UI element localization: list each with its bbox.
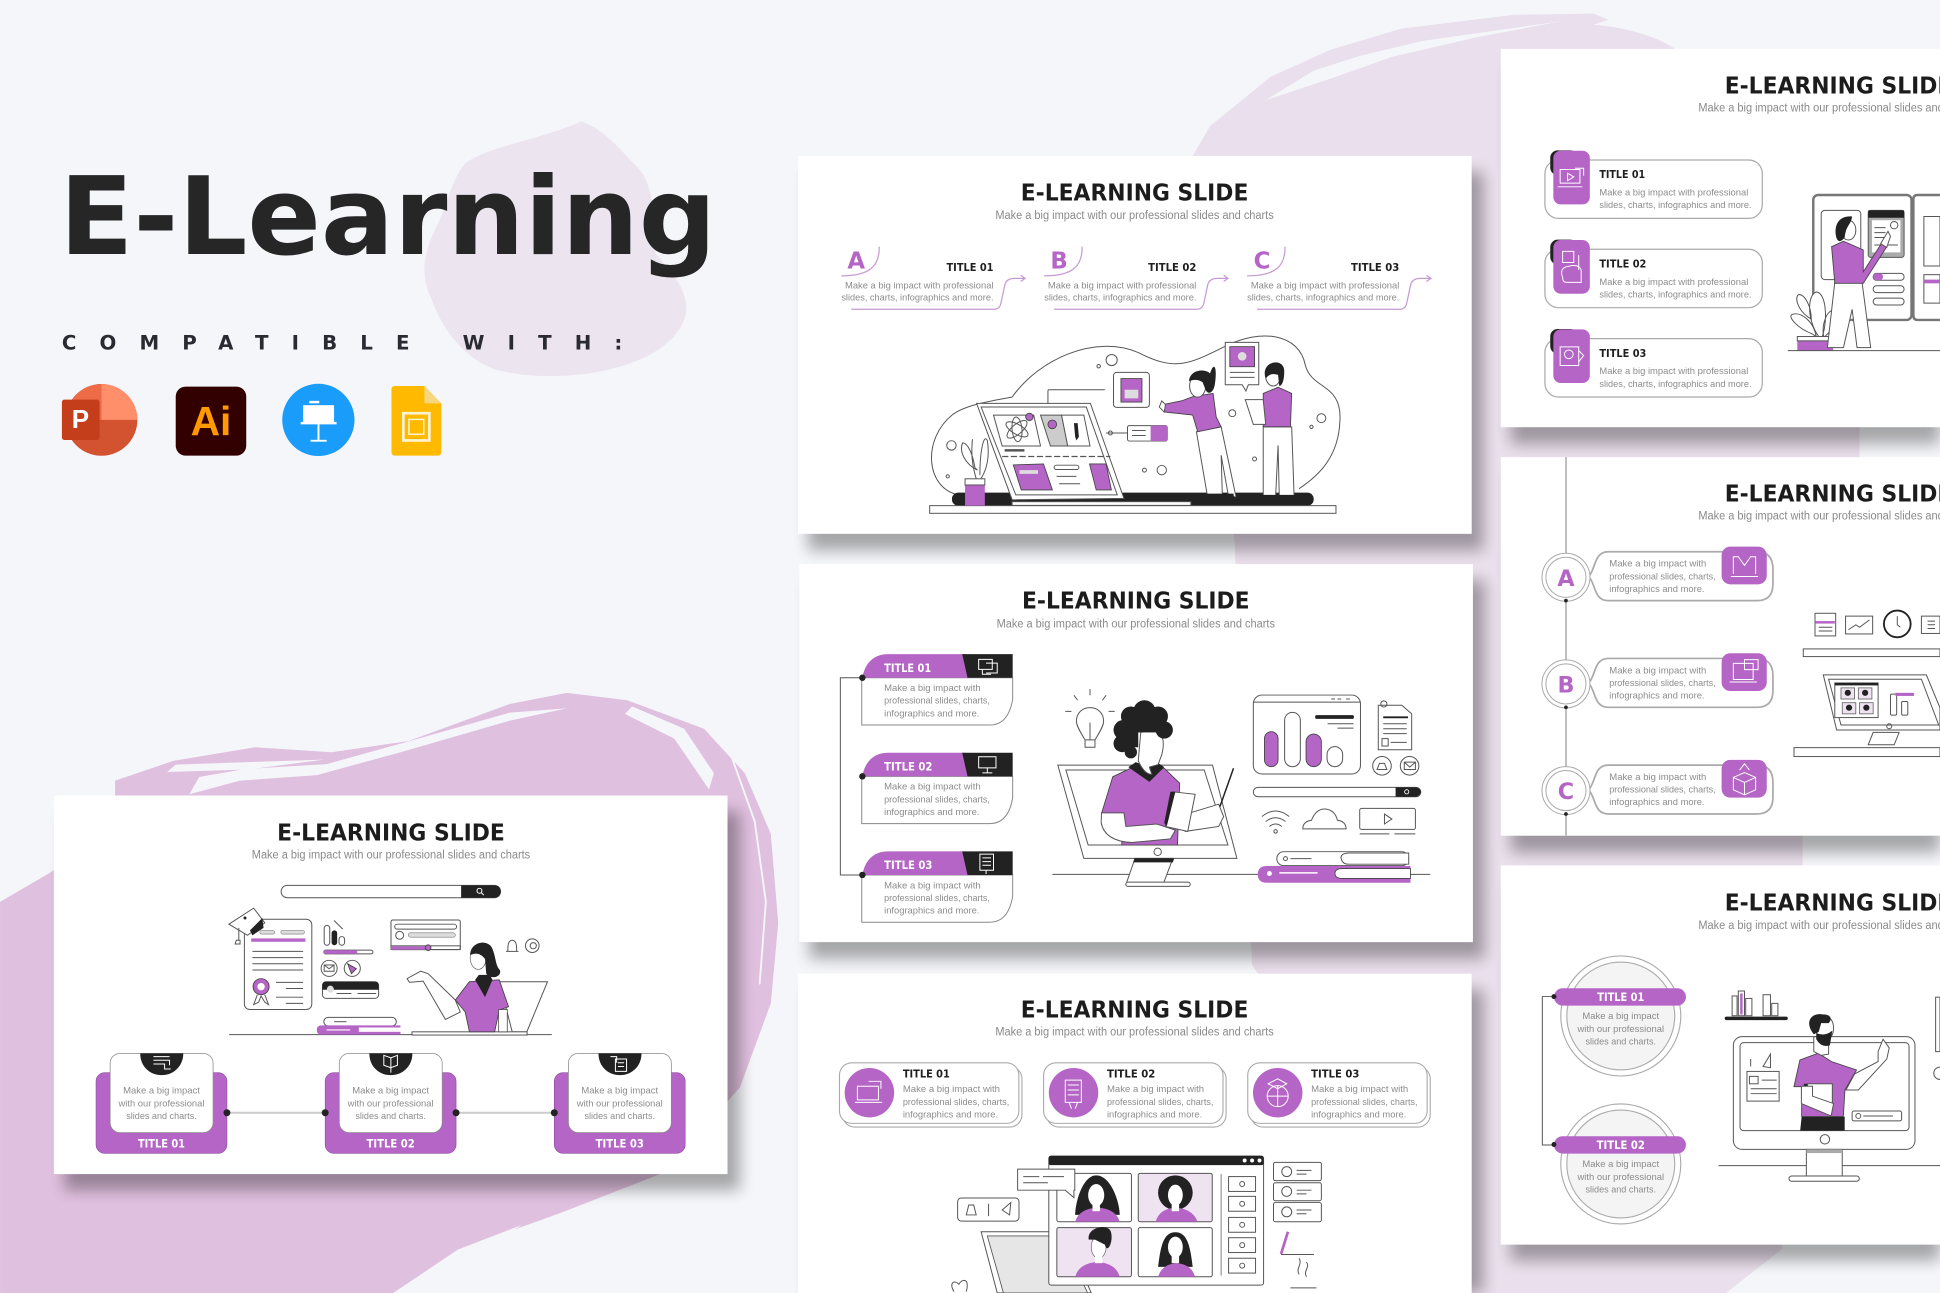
panel: slide 1: [798, 156, 1483, 551]
card 03: Make a big impact: [581, 1085, 658, 1096]
card 01: [1545, 150, 1762, 218]
books: [1277, 852, 1409, 866]
card 01: professional slides, charts,: [903, 1096, 1009, 1107]
heading: E-LEARNING SLIDE: [1021, 997, 1248, 1023]
dark card: [322, 982, 379, 998]
laptop: [499, 982, 547, 1032]
brush: top right: [1193, 14, 1860, 1293]
circle card 02: Make a big impact: [1582, 1158, 1660, 1169]
card 02: Make a big impact with: [884, 781, 981, 792]
card 01: TITLE 01: [138, 1137, 185, 1151]
card 01: TITLE 01: [903, 1068, 950, 1081]
step B: B: [1050, 248, 1068, 274]
search bar: [1253, 787, 1421, 797]
circle card 01: with our professional: [1576, 1023, 1664, 1034]
card 03: TITLE 03: [1599, 347, 1646, 360]
panel: slide 2: [799, 564, 1485, 959]
card 02: infographics and more.: [1107, 1109, 1202, 1120]
panel: right slide 2: [1501, 457, 1940, 852]
card 01: infographics and more.: [884, 707, 979, 718]
icon: Keynote: [282, 384, 354, 456]
card 01: infographics and more.: [903, 1109, 998, 1120]
arm: [407, 971, 460, 1019]
card 03: slides, charts, infographics and more.: [1599, 378, 1752, 389]
icon: Illustrator: Ai: [191, 398, 231, 444]
illustration: video call: [952, 1156, 1321, 1293]
card 03: slides and charts.: [584, 1110, 655, 1121]
icon: PowerPoint: P: [72, 404, 89, 434]
step A: TITLE 01: [946, 261, 994, 274]
circle card 02: [1551, 1104, 1686, 1224]
item A: infographics and more.: [1609, 583, 1705, 594]
step C: Make a big impact with professional: [1251, 279, 1399, 290]
item A: Make a big impact with: [1609, 558, 1706, 569]
certificate: [244, 919, 312, 1010]
illustration: man at board: [1788, 195, 1940, 351]
step C: slides, charts, infographics and more.: [1247, 292, 1399, 303]
item B: infographics and more.: [1609, 690, 1705, 701]
item B: [1542, 653, 1773, 709]
card 01: [96, 1053, 230, 1153]
illustration: woman and learning widgets: [229, 908, 552, 1035]
video: [1360, 808, 1415, 829]
circle card 01: slides and charts.: [1586, 1036, 1656, 1047]
arm: [1178, 804, 1224, 831]
step C: TITLE 03: [1351, 261, 1399, 274]
step C: [1247, 247, 1431, 309]
card 02: professional slides, charts,: [1107, 1096, 1213, 1107]
card 03: TITLE 03: [884, 858, 932, 872]
item B: Make a big impact with: [1609, 664, 1706, 675]
card 02: Make a big impact: [352, 1085, 429, 1096]
item C: professional slides, charts,: [1609, 784, 1716, 795]
tile 4: [1138, 1228, 1212, 1277]
subheading: Make a big impact with our professional slides and charts: [997, 616, 1275, 630]
woman: [455, 980, 509, 1032]
document: [1378, 705, 1412, 750]
tile 2: [1138, 1173, 1212, 1222]
light bulb: [1065, 689, 1115, 747]
search bar: [281, 885, 501, 898]
card 01: slides, charts, infographics and more.: [1599, 199, 1752, 210]
card 03: infographics and more.: [1311, 1109, 1406, 1120]
circle card 01: Make a big impact: [1582, 1010, 1660, 1021]
card 01: [839, 1063, 1022, 1127]
card 02: [322, 1053, 460, 1153]
card 02: slides and charts.: [355, 1110, 426, 1121]
panel: slide 3: [798, 974, 1483, 1293]
plant: [1791, 292, 1836, 337]
heading: E-LEARNING SLIDE: [1021, 180, 1248, 206]
step A: A: [847, 248, 865, 274]
cloud: [1303, 809, 1346, 829]
step C: C: [1254, 248, 1270, 274]
card 03: Make a big impact with professional: [1599, 365, 1748, 376]
tile 1: [1057, 1173, 1131, 1222]
card 03: [859, 851, 1013, 922]
step A: [841, 247, 1025, 309]
card 01: TITLE 01: [1599, 168, 1645, 181]
wifi: [1262, 811, 1289, 826]
card 01: [859, 654, 1013, 725]
illustration: teacher on monitor: [1719, 991, 1940, 1181]
curly hair: [1114, 700, 1173, 758]
person: [1827, 282, 1871, 348]
step A: slides, charts, infographics and more.: [841, 292, 994, 303]
connector: [1542, 997, 1554, 1145]
item A: A: [1557, 566, 1575, 592]
card 03: TITLE 03: [596, 1137, 644, 1151]
card 01: Make a big impact with: [903, 1083, 1000, 1094]
step B: slides, charts, infographics and more.: [1044, 292, 1196, 303]
connector: [840, 678, 862, 875]
icon: PowerPoint: [62, 384, 137, 456]
subheading: Make a big impact with our professional slides and charts: [252, 848, 530, 862]
connectors: [227, 1112, 554, 1114]
card 02: [1545, 240, 1762, 308]
item B: B: [1557, 672, 1574, 698]
man: [1263, 427, 1294, 497]
books: [324, 1017, 396, 1026]
card 01: TITLE 01: [884, 661, 931, 675]
card 03: with our professional: [576, 1097, 663, 1108]
icon: Illustrator: [176, 387, 246, 456]
circle card 01: TITLE 01: [1597, 990, 1644, 1004]
card 02: [1044, 1063, 1226, 1127]
panel: right slide 3: [1501, 865, 1940, 1261]
card 02: TITLE 02: [366, 1137, 415, 1151]
card 02: slides, charts, infographics and more.: [1599, 289, 1752, 300]
graduation cap: [229, 908, 265, 935]
card 02: Make a big impact with professional: [1599, 276, 1748, 287]
compatible with heading: COMPATIBLE WITH:: [62, 332, 622, 355]
item A: professional slides, charts,: [1609, 570, 1716, 581]
card 02: TITLE 02: [1599, 257, 1646, 270]
panel: right slide 1: [1501, 49, 1940, 444]
illustration: teacher in monitor: [1052, 689, 1430, 886]
main title: E-Learning: [59, 155, 716, 280]
woman: [1196, 427, 1236, 497]
card 03: Make a big impact with: [884, 879, 981, 890]
card 03: [1545, 329, 1762, 397]
speech bubble: [1225, 342, 1259, 391]
step B: Make a big impact with professional: [1048, 279, 1196, 290]
card 03: TITLE 03: [1311, 1068, 1359, 1081]
subheading: Make a big impact with our professional slides and charts: [995, 208, 1274, 222]
illustration: computer with video call: [1794, 611, 1940, 757]
item C: C: [1558, 779, 1574, 805]
mini bars: [324, 925, 330, 945]
card 03: professional slides, charts,: [884, 892, 990, 903]
chart window: [1253, 695, 1360, 774]
card 03: infographics and more.: [884, 905, 979, 916]
card 01: Make a big impact with: [884, 682, 981, 693]
icon: Google Slides: [391, 386, 441, 456]
card 03: [551, 1053, 685, 1153]
step B: TITLE 02: [1148, 261, 1196, 274]
step A: Make a big impact with professional: [845, 279, 994, 290]
top right card: [391, 920, 460, 950]
tile 3: [1057, 1227, 1131, 1277]
circle card 02: TITLE 02: [1597, 1138, 1645, 1152]
step B: [1044, 247, 1228, 309]
circle card 02: slides and charts.: [1586, 1184, 1656, 1195]
item A: [1542, 547, 1773, 603]
card 01: Make a big impact: [123, 1085, 200, 1096]
card 02: Make a big impact with: [1107, 1083, 1204, 1094]
heading: E-LEARNING SLIDE: [277, 821, 505, 847]
heading: E-LEARNING SLIDE: [1022, 589, 1250, 615]
panel: left slide: [54, 796, 740, 1190]
item C: [1542, 760, 1773, 816]
card 01: professional slides, charts,: [884, 695, 990, 706]
vertical timeline: [1565, 457, 1567, 836]
subheading: Make a big impact with our professional slides and charts: [995, 1025, 1274, 1039]
card 01: Make a big impact with professional: [1599, 186, 1748, 197]
card 02: TITLE 02: [884, 759, 932, 773]
card 02: professional slides, charts,: [884, 793, 990, 804]
illustration: two people and laptop: [930, 336, 1340, 513]
item C: infographics and more.: [1609, 796, 1705, 807]
card 03: [1248, 1063, 1430, 1127]
circle card 01: [1551, 956, 1686, 1076]
card 02: with our professional: [347, 1097, 434, 1108]
card 01: slides and charts.: [126, 1110, 197, 1121]
card 02: [859, 753, 1013, 824]
item B: professional slides, charts,: [1609, 677, 1716, 688]
card 03: professional slides, charts,: [1311, 1096, 1417, 1107]
brush: behind heading: [424, 121, 686, 376]
card 03: Make a big impact with: [1311, 1083, 1408, 1094]
circle card 02: with our professional: [1576, 1171, 1664, 1182]
brush: bottom left: [0, 693, 778, 1293]
card 02: infographics and more.: [884, 806, 979, 817]
item C: Make a big impact with: [1609, 771, 1706, 782]
card 01: with our professional: [118, 1097, 204, 1108]
card 02: TITLE 02: [1107, 1068, 1155, 1081]
